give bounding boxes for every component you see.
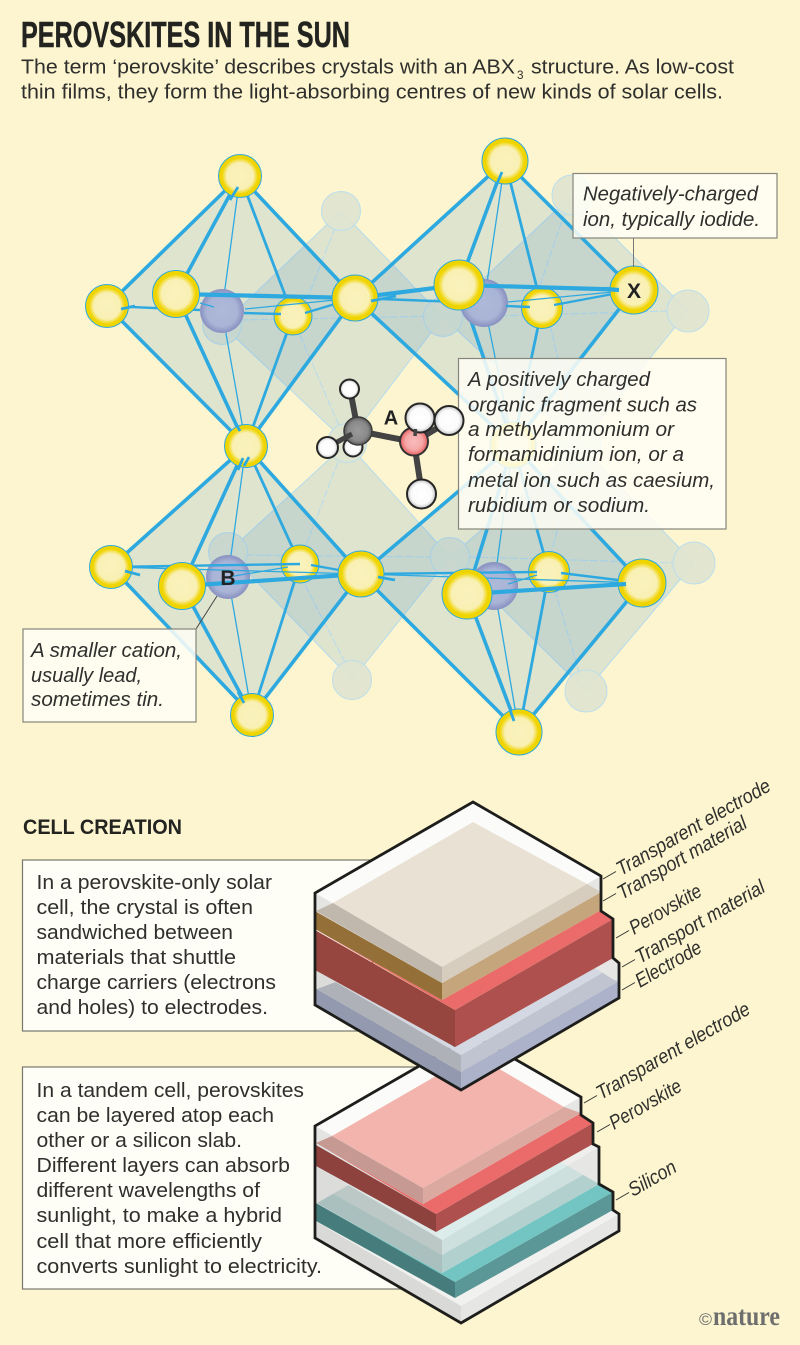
heading: cell creation: CELL CREATION xyxy=(23,816,182,839)
panel: tandem cell text xyxy=(22,1067,418,1289)
callout: negatively charged ion: Negatively-charged xyxy=(583,184,759,206)
layer label: transport material: Transport material xyxy=(614,812,751,904)
callout: positively charged fragment: a methylammonium or xyxy=(468,419,675,441)
intro text: structure. As low-cost xyxy=(531,56,734,78)
panel: tandem cell text: sunlight, to make a hybrid xyxy=(36,1205,282,1227)
organic molecule A xyxy=(317,380,464,508)
equatorial bonds xyxy=(107,285,642,594)
silicon layer xyxy=(316,1184,613,1298)
nature credit: nature xyxy=(713,1301,780,1331)
layer label: perovskite: Perovskite xyxy=(626,880,706,939)
panel: perovskite-only cell text xyxy=(22,860,372,1031)
front octahedra faces xyxy=(107,161,642,732)
bottom white slab xyxy=(315,1210,619,1323)
octahedra edges xyxy=(107,161,642,732)
lead cations and rear iodide atoms xyxy=(200,279,570,610)
title: PEROVSKITES IN THE SUN xyxy=(21,14,350,55)
panel: perovskite-only cell text: cell, the crystal is often xyxy=(36,897,253,919)
layer label: tandem perovskite: Perovskite xyxy=(606,1075,686,1134)
transparent electrode xyxy=(315,802,601,983)
intro text xyxy=(21,56,734,104)
panel: perovskite-only cell text: sandwiched between xyxy=(36,922,233,944)
callout: positively charged fragment: formamidinium ion, or a xyxy=(468,444,684,466)
perovskite layer xyxy=(315,910,613,1047)
intro text: 3 xyxy=(517,68,524,82)
callout: positively charged fragment: A positively charged xyxy=(467,369,651,391)
tandem cell layer stack xyxy=(315,1035,619,1323)
callout: smaller cation: sometimes tin. xyxy=(31,689,164,711)
panel: tandem cell text: different wavelengths of xyxy=(36,1180,260,1202)
panel: perovskite-only cell text: and holes) to electrodes. xyxy=(36,997,268,1019)
callout: positively charged fragment: metal ion such as caesium, xyxy=(468,470,715,492)
callout: smaller cation: A smaller cation, xyxy=(30,640,182,662)
layer label: electrode: Electrode xyxy=(632,937,706,992)
panel: tandem cell text: cell that more efficiently xyxy=(36,1231,262,1253)
bond stubs over atoms xyxy=(121,172,626,721)
outline xyxy=(315,1035,619,1323)
layer label: transparent electrode: Transparent electrode xyxy=(613,775,775,880)
lower transport material xyxy=(315,958,619,1072)
intro text: thin films, they form the light-absorbing centres of new kinds of solar cells. xyxy=(21,82,723,104)
transparent middle layers xyxy=(316,1144,599,1273)
front iodide atoms xyxy=(86,138,666,755)
outline xyxy=(315,802,619,1090)
stack underlay xyxy=(315,1035,619,1323)
layer label: tandem transparent electrode: Transparent electrode xyxy=(592,998,754,1104)
perovskite layer xyxy=(316,1113,593,1232)
callout: negatively charged ion: ion, typically iodide. xyxy=(583,209,760,231)
electrode xyxy=(315,981,619,1090)
nature credit: © xyxy=(699,1310,712,1329)
perovskite-only cell layer stack xyxy=(315,802,619,1090)
crystal structure diagram xyxy=(86,138,715,755)
panel: perovskite-only cell text: materials that shuttle xyxy=(36,947,236,969)
panel: tandem cell text: In a tandem cell, perovskites xyxy=(36,1080,304,1102)
layer label: transport material lower: Transport material xyxy=(632,876,769,968)
callout: negatively charged ion xyxy=(573,174,777,267)
iodide label X: X xyxy=(627,280,641,303)
panel: tandem cell text: converts sunlight to electricity. xyxy=(36,1256,322,1278)
transparent electrode xyxy=(315,1035,581,1204)
panel: perovskite-only cell text: charge carriers (electrons xyxy=(36,972,276,994)
callout: smaller cation xyxy=(23,596,217,722)
panel: tandem cell text: other or a silicon slab. xyxy=(36,1130,242,1152)
callout: positively charged fragment: rubidium or sodium. xyxy=(468,495,650,517)
panel: tandem cell text: Different layers can absorb xyxy=(36,1155,290,1177)
back octahedra (ghost layer) xyxy=(202,175,715,712)
layer label: silicon: Silicon xyxy=(624,1156,681,1201)
panel: perovskite-only cell text: In a perovskite-only solar xyxy=(36,872,272,894)
upper transport material xyxy=(315,892,601,1000)
callout: smaller cation: usually lead, xyxy=(31,665,142,687)
callout: positively charged fragment: organic fragment such as xyxy=(468,394,697,416)
callout: positively charged fragment xyxy=(458,358,726,529)
lead label B: B xyxy=(220,567,236,590)
panel: tandem cell text: can be layered atop each xyxy=(36,1105,274,1127)
label A: A xyxy=(384,408,398,430)
intro text: The term ‘perovskite’ describes crystals with an ABX xyxy=(21,56,515,78)
